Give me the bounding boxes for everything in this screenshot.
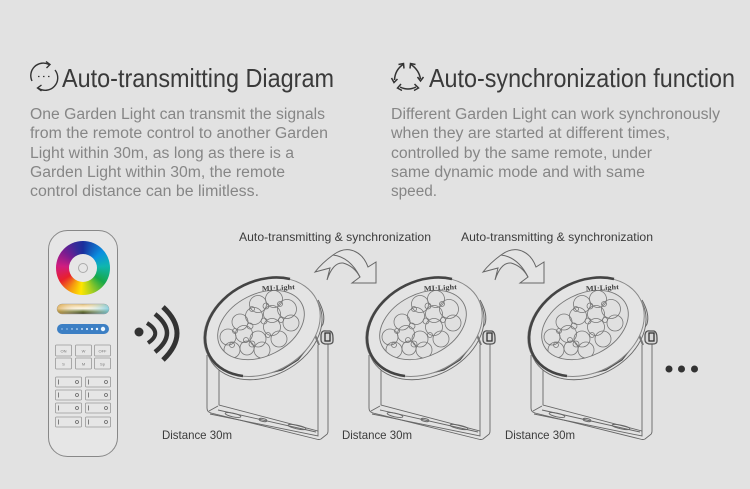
icon: chat sync xyxy=(31,62,58,91)
tunable white bar xyxy=(57,304,109,314)
icon: sync arrows xyxy=(392,64,424,90)
brightness slider xyxy=(57,324,109,334)
remote control: M xyxy=(82,362,85,366)
label: auto-transmitting 2: Auto-transmitting & synchronization xyxy=(461,230,653,244)
remote control: OFF xyxy=(98,348,107,354)
garden light 2: MI·Light xyxy=(424,283,458,293)
label: auto-transmitting 1: Auto-transmitting & synchronization xyxy=(239,230,431,244)
garden light 1: MI·Light xyxy=(262,283,296,293)
text block: left description: from the remote control to another Garden xyxy=(30,125,328,142)
label: distance 1: Distance 30m xyxy=(162,428,232,442)
text block: right description: controlled by the same remote, under xyxy=(391,145,652,162)
remote control: W xyxy=(82,348,86,354)
remote control xyxy=(48,230,118,456)
remote control: Sp xyxy=(100,362,106,366)
text block: left description: Light within 30m, as long as there is a xyxy=(30,145,294,162)
text block: left description: control distance can be limitless. xyxy=(30,183,259,200)
text block: right description: speed. xyxy=(391,183,437,200)
arrow 2 xyxy=(483,250,544,283)
text block: right description: Different Garden Light can work synchronously xyxy=(391,106,720,123)
text block: left description: Garden Light within 30m, the remote xyxy=(30,164,285,181)
remote control: S xyxy=(62,362,65,366)
label: distance 3: Distance 30m xyxy=(505,428,575,442)
text block: right description: same dynamic mode and with same xyxy=(391,164,645,181)
garden light 3: MI·Light xyxy=(586,283,620,293)
text block: left description: One Garden Light can transmit the signals xyxy=(30,106,325,123)
icon: colour wheel xyxy=(56,241,110,295)
remote control: ON xyxy=(60,348,67,354)
garden light 2 xyxy=(349,258,501,440)
text block: left description xyxy=(30,106,328,200)
arrow 1 xyxy=(315,250,376,283)
icon: wireless signal xyxy=(134,307,177,360)
keypad xyxy=(56,345,110,427)
text block: right description xyxy=(390,106,720,200)
text block: right description: when they are started at different times, xyxy=(390,125,670,142)
garden light 1 xyxy=(187,258,339,440)
heading: auto-transmitting: Auto-transmitting Diagram xyxy=(62,63,334,93)
garden light 3 xyxy=(511,258,663,440)
icon: ellipsis dots xyxy=(666,366,698,372)
label: distance 2: Distance 30m xyxy=(342,428,412,442)
